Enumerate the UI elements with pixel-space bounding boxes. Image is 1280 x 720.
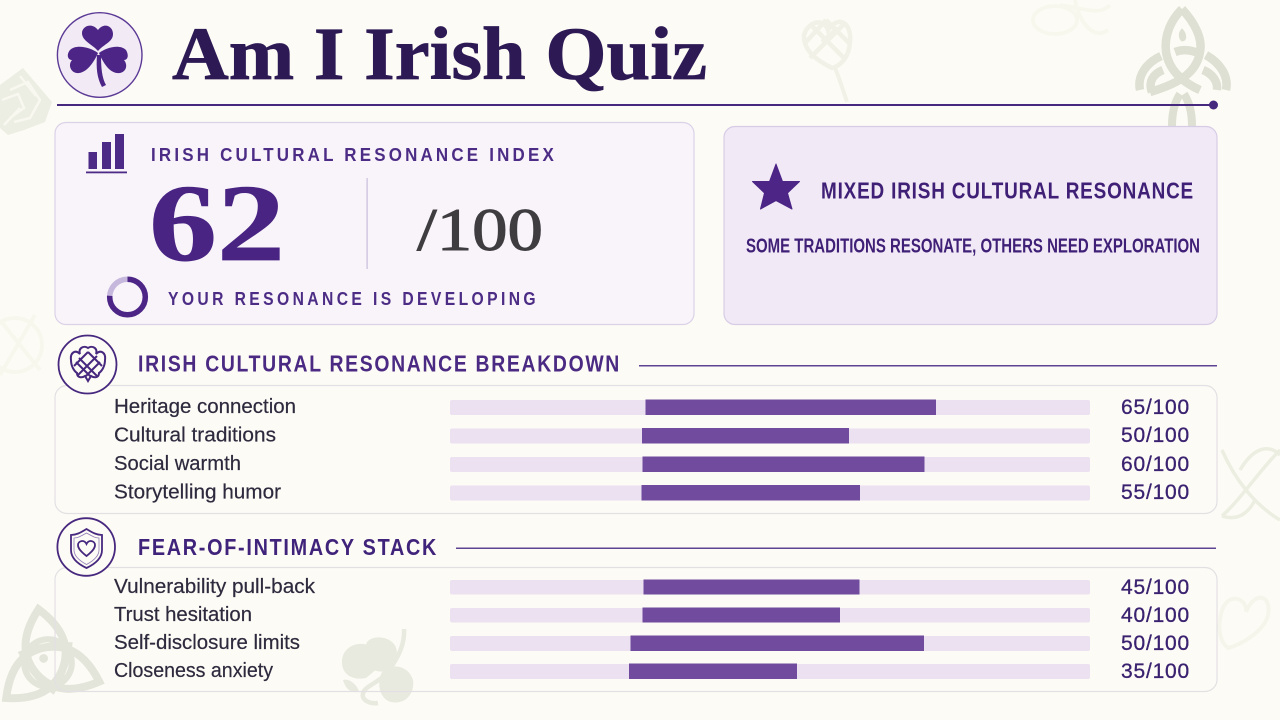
icon: star <box>752 164 800 209</box>
row: vulnerability pull-back <box>114 575 1190 599</box>
index heading: IRISH CULTURAL RESONANCE INDEX <box>151 144 557 165</box>
icon: progress donut <box>110 279 145 315</box>
decorative knot: top centre <box>804 20 850 102</box>
decorative knot: right faint <box>1220 598 1269 648</box>
section rule <box>639 365 1217 366</box>
row: cultural traditions: Cultural traditions <box>114 424 276 446</box>
row: heritage connection <box>114 395 1190 419</box>
row: trust hesitation <box>114 603 1190 627</box>
header rule with end dot <box>57 100 1218 110</box>
decorative knot: right <box>1222 449 1280 520</box>
row: closeness anxiety: 35/100 <box>1121 660 1190 683</box>
row: storytelling humor: 55/100 <box>1121 481 1190 504</box>
row: trust hesitation: Trust hesitation <box>114 603 252 626</box>
row: social warmth: 60/100 <box>1121 453 1190 476</box>
section heading: FEAR-OF-INTIMACY STACK <box>138 534 438 560</box>
icon: celtic knot badge <box>58 336 116 394</box>
row: vulnerability pull-back: Vulnerability pull-back <box>114 575 316 598</box>
icon: shamrock badge <box>57 13 142 97</box>
row: self-disclosure limits: Self-disclosure limits <box>114 631 300 654</box>
icon: shield heart badge <box>57 518 115 576</box>
score 62: 62 <box>149 162 285 284</box>
row: social warmth <box>114 452 1190 476</box>
row: self-disclosure limits <box>114 631 1190 655</box>
row: vulnerability pull-back: 45/100 <box>1121 576 1190 599</box>
row: heritage connection: Heritage connection <box>114 395 296 418</box>
section heading: IRISH CULTURAL RESONANCE BREAKDOWN <box>138 350 621 376</box>
score divider <box>366 178 368 269</box>
decorative celtic knot: bottom left <box>0 599 112 717</box>
verdict heading: MIXED IRISH CULTURAL RESONANCE <box>821 178 1194 204</box>
row: self-disclosure limits: 50/100 <box>1121 632 1190 655</box>
decorative celtic knot: top right <box>1139 9 1227 126</box>
title: Am I Irish Quiz <box>172 13 707 96</box>
row: storytelling humor: Storytelling humor <box>114 480 281 504</box>
panel: cultural resonance breakdown <box>55 336 1217 514</box>
decorative knot: left <box>0 68 52 135</box>
panel: fear-of-intimacy stack <box>55 518 1217 692</box>
decorative knot: top right faint <box>1033 0 1110 34</box>
row: social warmth: Social warmth <box>114 452 241 475</box>
section rule <box>456 548 1216 549</box>
row: cultural traditions: 50/100 <box>1121 424 1190 447</box>
icon: bar chart <box>86 134 127 173</box>
status line: YOUR RESONANCE IS DEVELOPING <box>168 288 539 309</box>
panel: resonance index score <box>55 122 694 324</box>
row: heritage connection: 65/100 <box>1121 396 1190 419</box>
row: storytelling humor <box>114 480 1190 504</box>
panel: mixed resonance verdict <box>724 126 1217 324</box>
decorative knot: left faint <box>0 315 42 375</box>
score denominator: /100 <box>417 197 543 263</box>
row: closeness anxiety <box>114 659 1190 683</box>
row: closeness anxiety: Closeness anxiety <box>114 659 274 682</box>
decorative shamrock: bottom centre <box>342 629 413 703</box>
row: cultural traditions <box>114 424 1190 447</box>
row: trust hesitation: 40/100 <box>1121 604 1190 627</box>
